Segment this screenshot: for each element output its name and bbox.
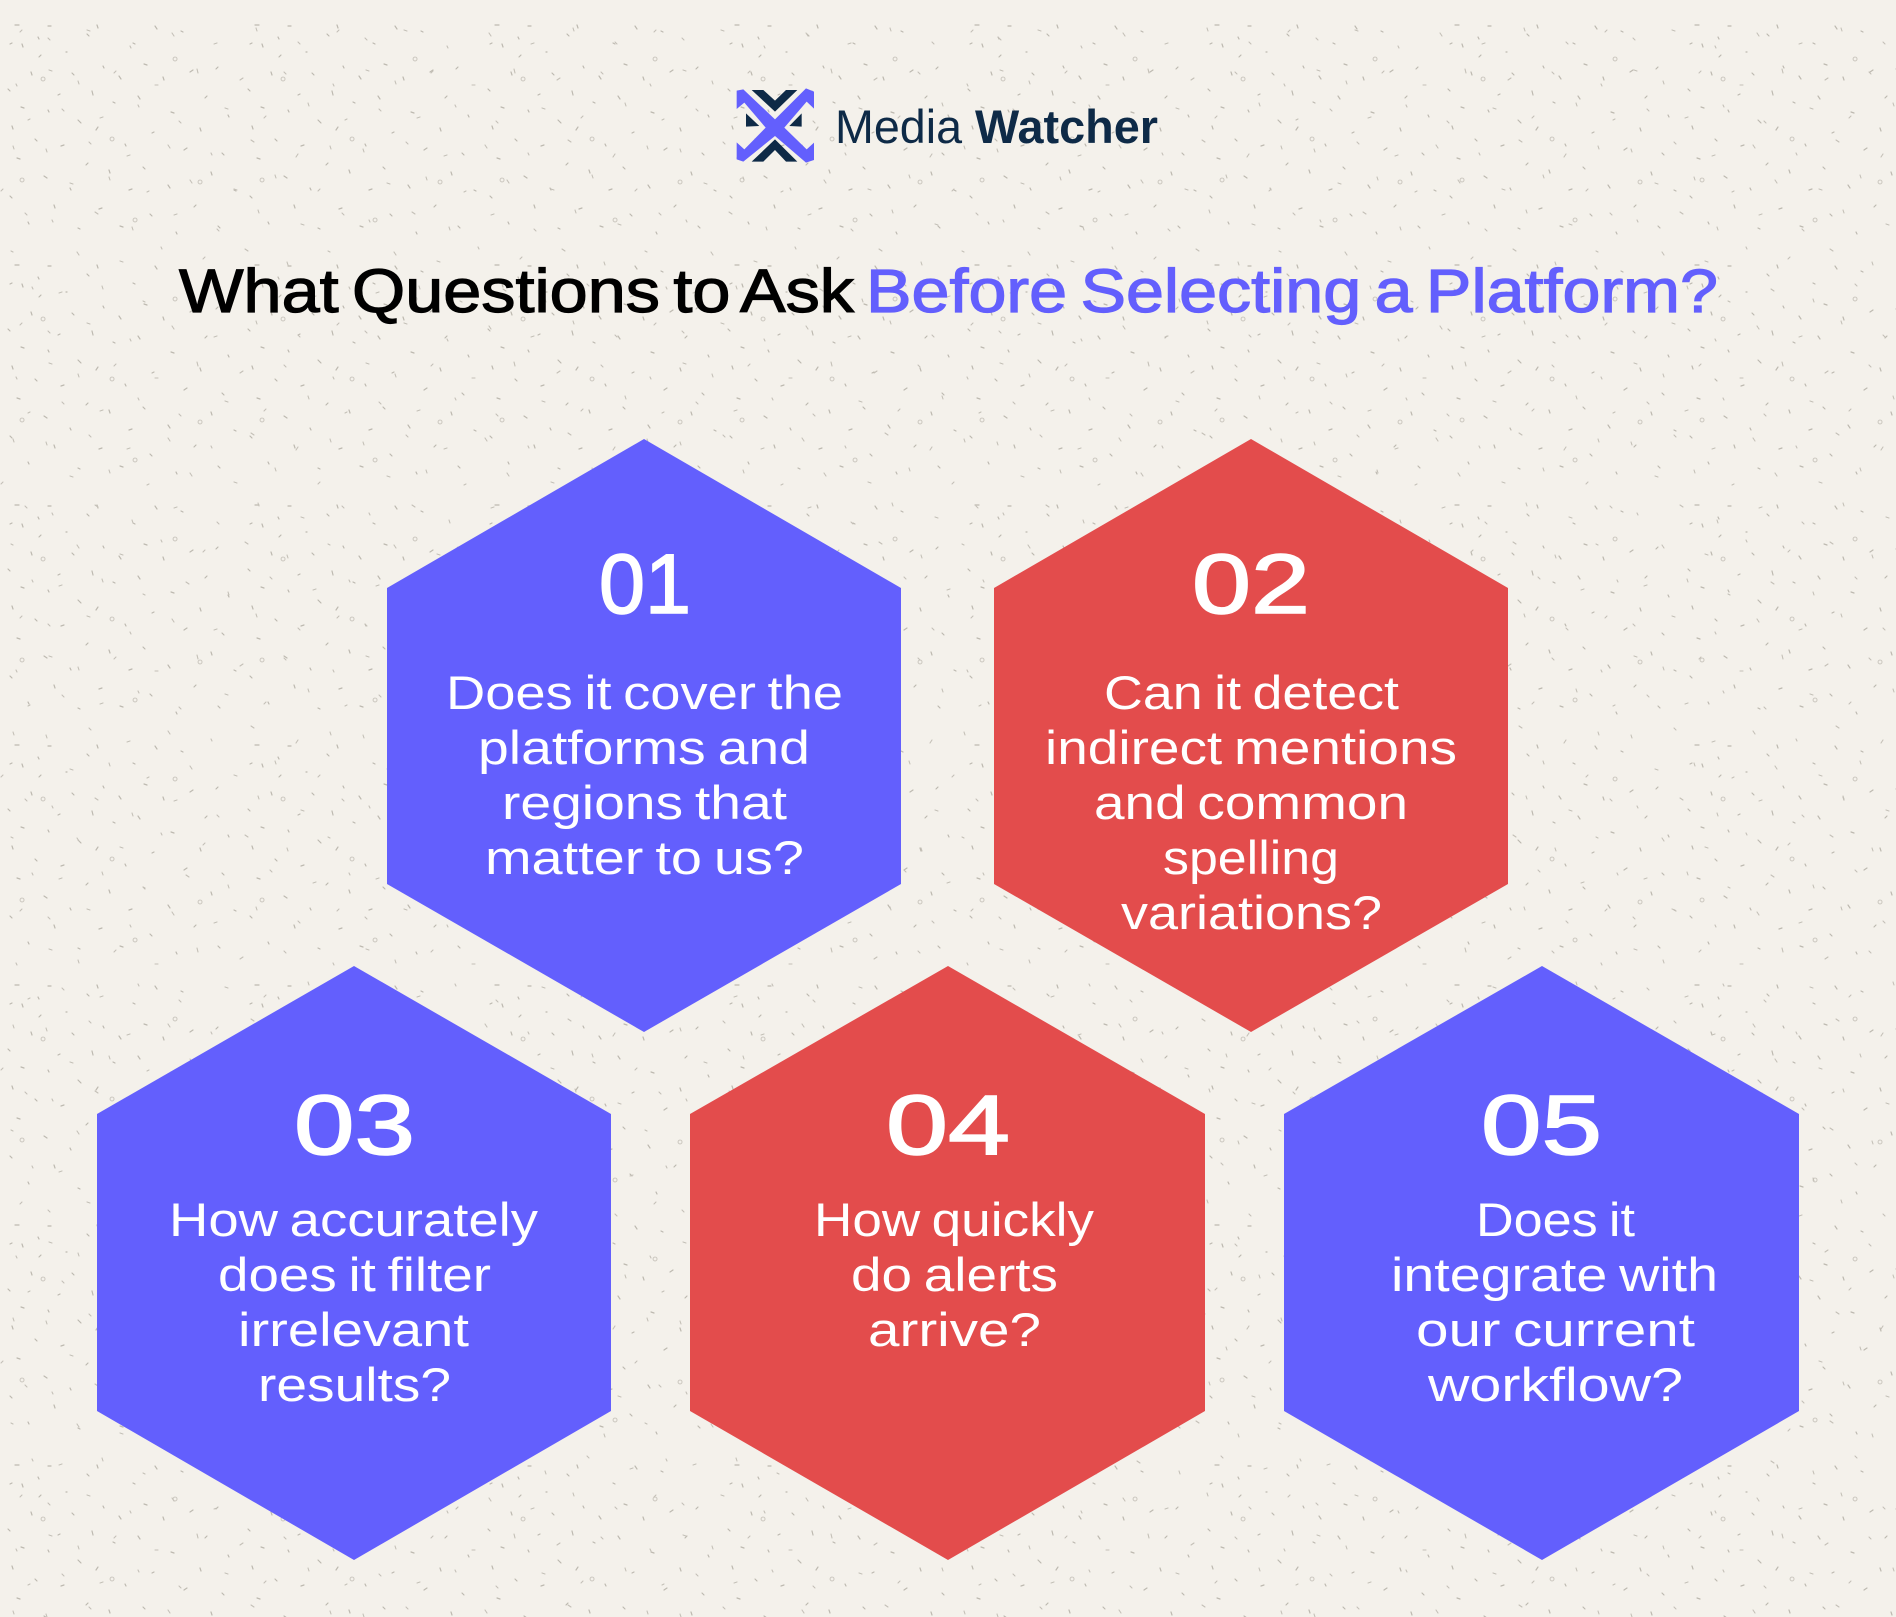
- number 04: 04: [886, 1078, 1010, 1172]
- number 03: 03: [294, 1078, 415, 1172]
- question text 02: Can it detect: [1104, 666, 1399, 719]
- question text 04: do alerts: [851, 1248, 1058, 1301]
- question text 03: irrelevant: [238, 1303, 469, 1356]
- question text 01: platforms and: [478, 721, 810, 774]
- question text 02: spelling: [1163, 831, 1339, 884]
- question text 05: [1391, 1193, 1718, 1411]
- question text 03: results?: [258, 1358, 451, 1411]
- question text 04: arrive?: [868, 1303, 1041, 1356]
- logo wordmark: Watcher: [975, 100, 1158, 153]
- title: What Questions to Ask: [179, 257, 855, 325]
- question text 02: and common: [1094, 776, 1408, 829]
- question text 01: Does it cover the: [446, 666, 843, 719]
- question text 02: indirect mentions: [1045, 721, 1457, 774]
- number 02: 02: [1192, 537, 1310, 631]
- panel: question 02: [994, 439, 1508, 1032]
- question text 05: our current: [1416, 1303, 1695, 1356]
- title: Before Selecting a Platform?: [866, 257, 1718, 325]
- question text 01: regions that: [502, 776, 787, 829]
- question text 01: matter to us?: [485, 831, 804, 884]
- question text 01: [446, 666, 843, 884]
- number 05: 05: [1481, 1078, 1602, 1172]
- question text 05: workflow?: [1427, 1358, 1683, 1411]
- number 01: 01: [599, 537, 691, 631]
- question text 03: does it filter: [218, 1248, 491, 1301]
- question text 03: How accurately: [169, 1193, 539, 1246]
- question text 04: How quickly: [814, 1193, 1095, 1246]
- icon: arrows X mark: [737, 88, 814, 163]
- panel: question 05: [1284, 966, 1799, 1560]
- question text 04: [814, 1193, 1095, 1356]
- logo: Media Watcher: [737, 88, 1158, 163]
- question text 03: [169, 1193, 539, 1411]
- panel: question 04: [690, 966, 1205, 1560]
- logo wordmark: Media: [835, 100, 963, 153]
- question text 05: Does it: [1476, 1193, 1635, 1246]
- question text 02: variations?: [1121, 886, 1382, 939]
- question text 02: [1045, 666, 1457, 939]
- panel: question 01: [387, 439, 901, 1032]
- question text 05: integrate with: [1391, 1248, 1718, 1301]
- panel: question 03: [97, 966, 611, 1560]
